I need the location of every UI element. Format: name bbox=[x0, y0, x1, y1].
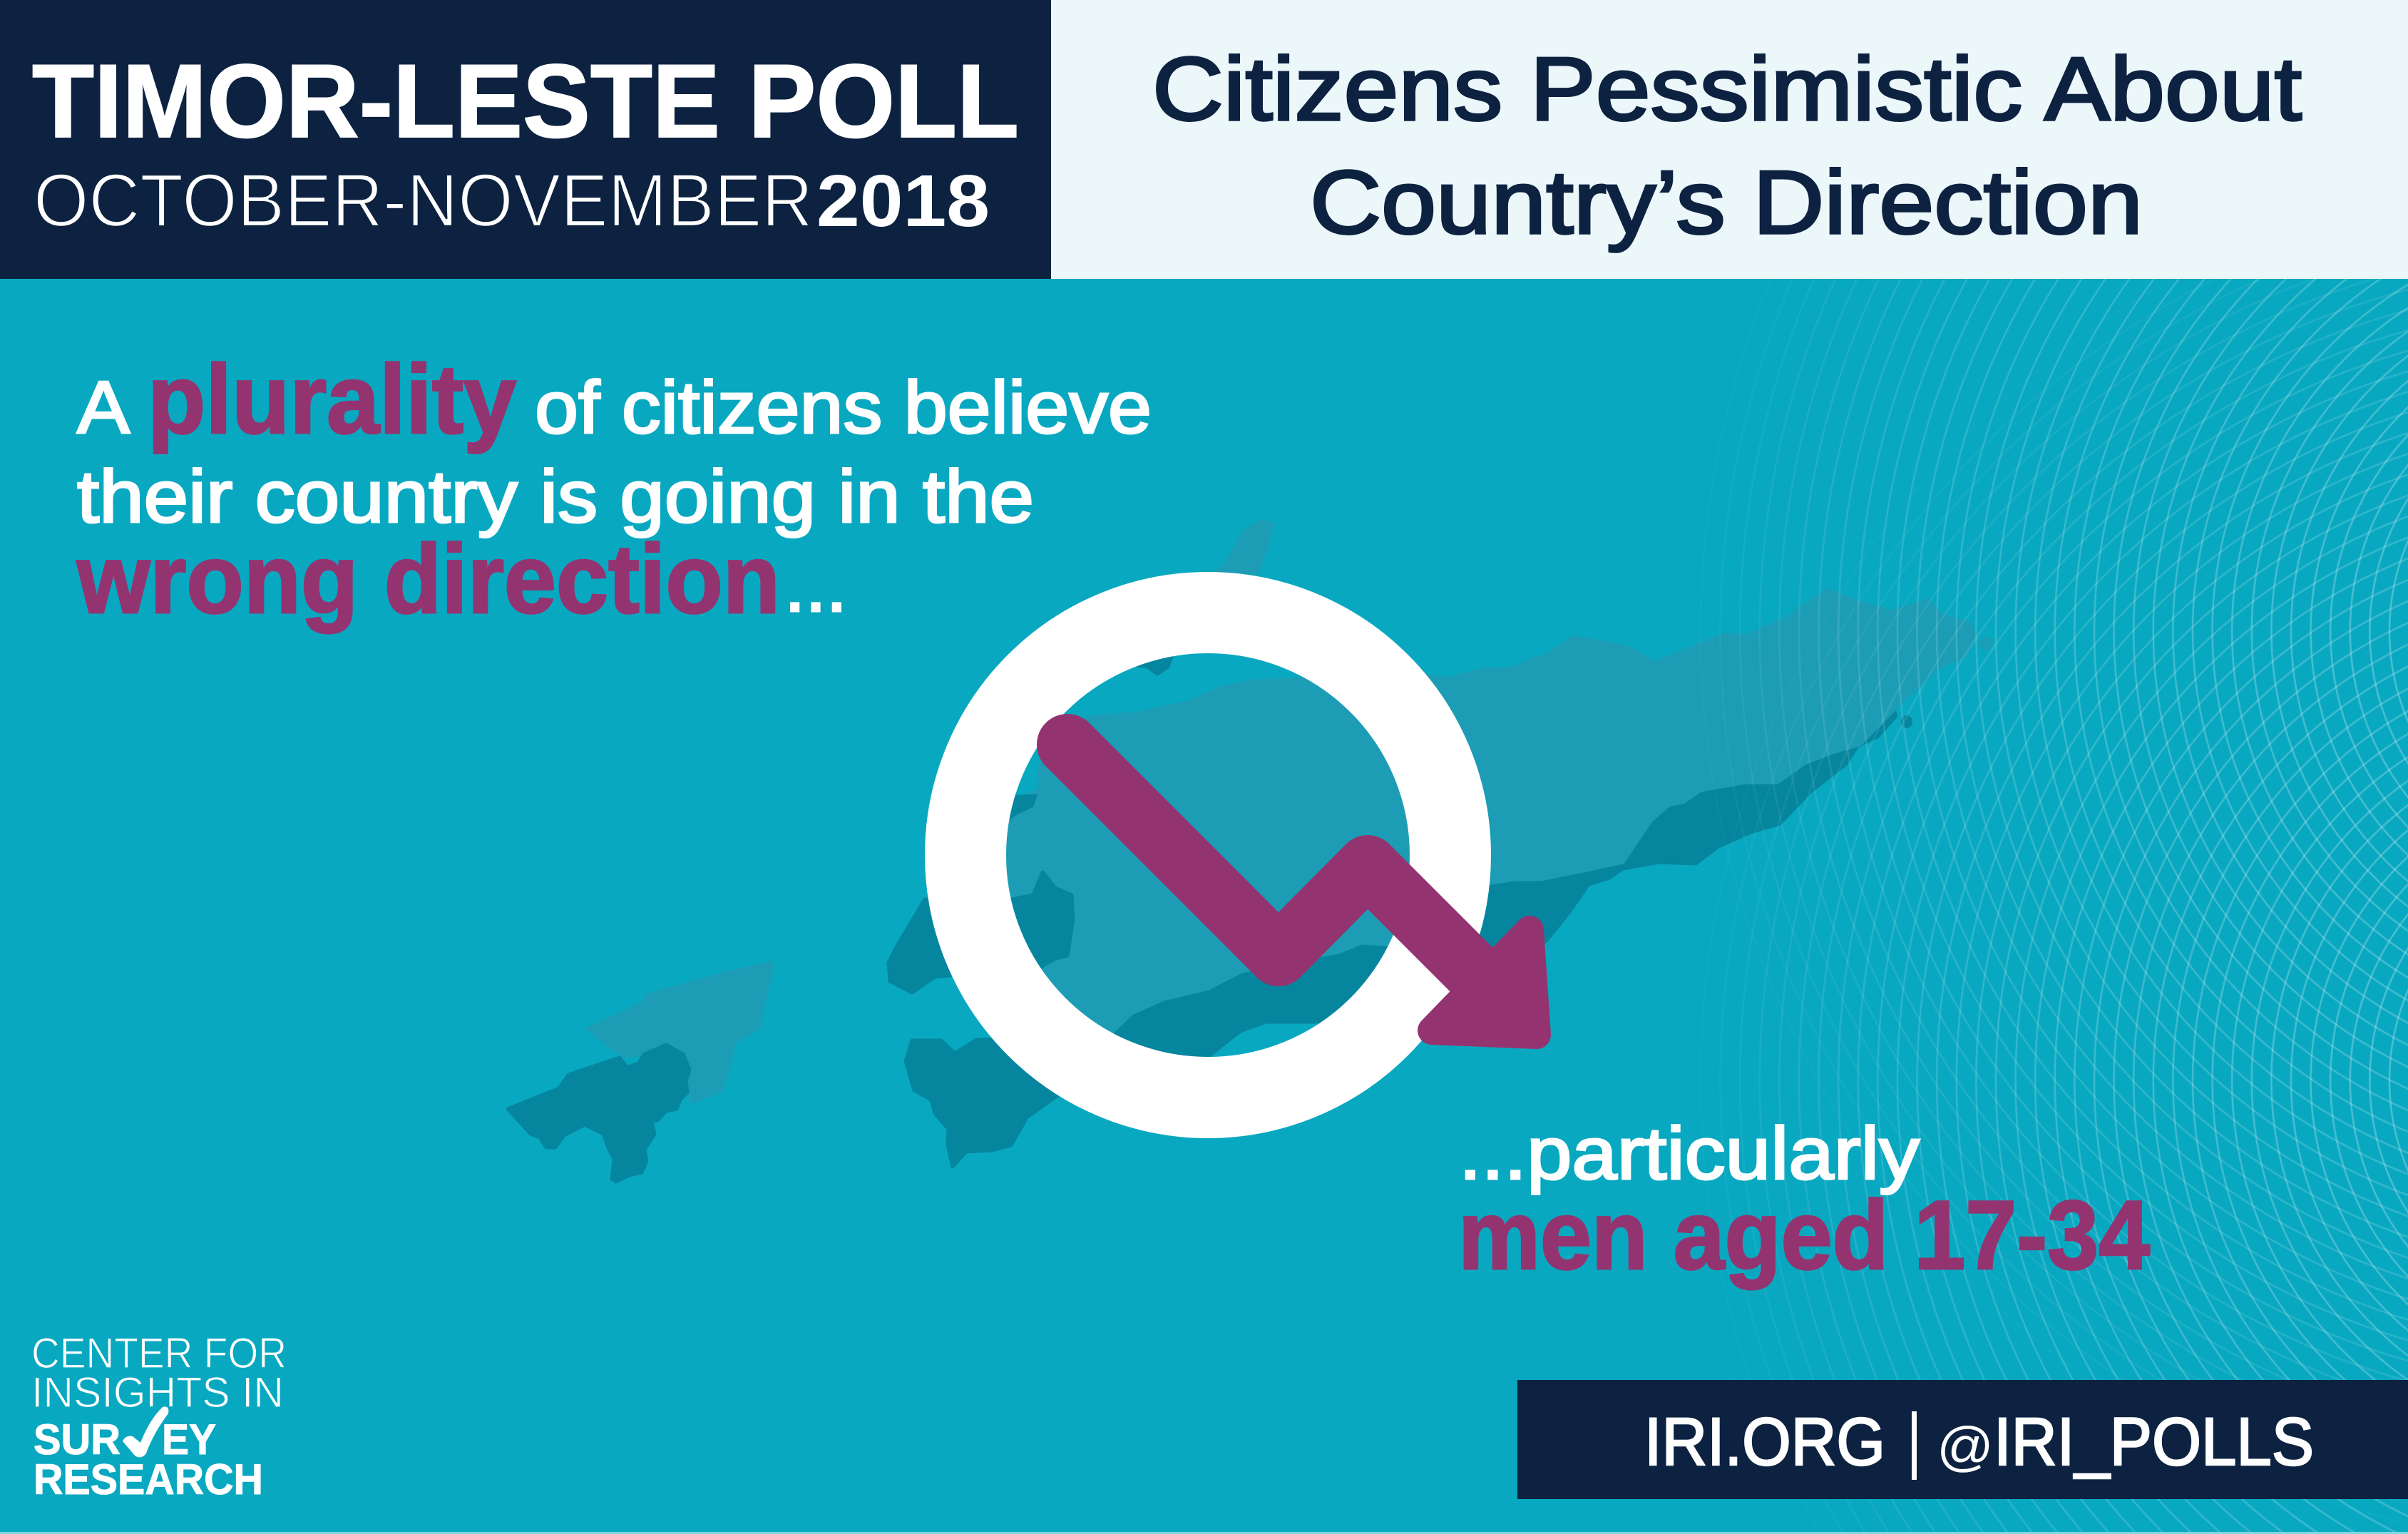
line 1 start: A bbox=[77, 367, 130, 449]
map: dark southern band bbox=[1098, 710, 1896, 1063]
subheading: dates: OCTOBER-NOVEMBER bbox=[34, 159, 813, 242]
map: dark wedge bbox=[1002, 796, 1035, 824]
keyword: men aged 17-34: men aged 17-34 bbox=[1458, 1181, 2150, 1290]
subheading: year: 2018 bbox=[816, 160, 990, 242]
map: light main island bbox=[991, 590, 1975, 1088]
heading: Timor-Leste Poll: TIMOR-LESTE POLL bbox=[32, 43, 1019, 159]
map: dark central island bbox=[888, 872, 1073, 993]
logo: Center for Insights in Survey Research bbox=[31, 1329, 287, 1503]
map: northern islet bbox=[1209, 521, 1273, 592]
text block: particularly men aged 17-34 bbox=[1458, 1113, 2150, 1290]
text block: plurality statement bbox=[76, 345, 1152, 634]
footer: website: IRI.ORG bbox=[1644, 1404, 1885, 1480]
footer: handle: IRI_POLLS bbox=[1994, 1404, 2314, 1480]
white circle ring bbox=[965, 613, 1450, 1098]
map: dark western island bbox=[508, 1045, 690, 1182]
title line 2: Country’s Direction bbox=[1310, 152, 2143, 252]
title line 1: Citizens Pessimistic About bbox=[1152, 39, 2302, 139]
keyword: plurality: plurality bbox=[148, 345, 516, 454]
logo line 2: INSIGHTS IN bbox=[31, 1369, 284, 1416]
line 1: ...particularly bbox=[1459, 1113, 1920, 1195]
header panel: poll name bbox=[0, 0, 1051, 279]
logo: EY: EY bbox=[162, 1416, 216, 1463]
line 1 end: of citizens believe bbox=[535, 367, 1152, 449]
map: eastern dark islet bbox=[1901, 715, 1912, 728]
ellipsis: ... bbox=[784, 545, 847, 628]
footer: at sign: @ bbox=[1937, 1416, 1994, 1477]
logo: checkmark bbox=[123, 1406, 168, 1458]
logo line 1: CENTER FOR bbox=[31, 1329, 287, 1377]
arrow: downward trend bbox=[1067, 745, 1537, 1035]
line 2: their country is going in the bbox=[77, 456, 1034, 538]
keyword: wrong direction: wrong direction bbox=[76, 525, 780, 634]
footer: divider bar bbox=[1912, 1411, 1917, 1480]
logo: SUR: SUR bbox=[34, 1416, 121, 1463]
bottom edge highlight bbox=[0, 1532, 2408, 1534]
map: eastern light islet bbox=[1979, 637, 1992, 650]
footer bar: website and handle bbox=[1517, 1380, 2408, 1499]
map: dark lower island bbox=[906, 1038, 1059, 1167]
map: light western island bbox=[588, 963, 772, 1102]
map: dark northern islet bbox=[1127, 628, 1177, 674]
header panel: title bbox=[1051, 0, 2408, 279]
map of Timor-Leste bbox=[508, 521, 1992, 1182]
logo: RESEARCH: RESEARCH bbox=[34, 1456, 263, 1503]
